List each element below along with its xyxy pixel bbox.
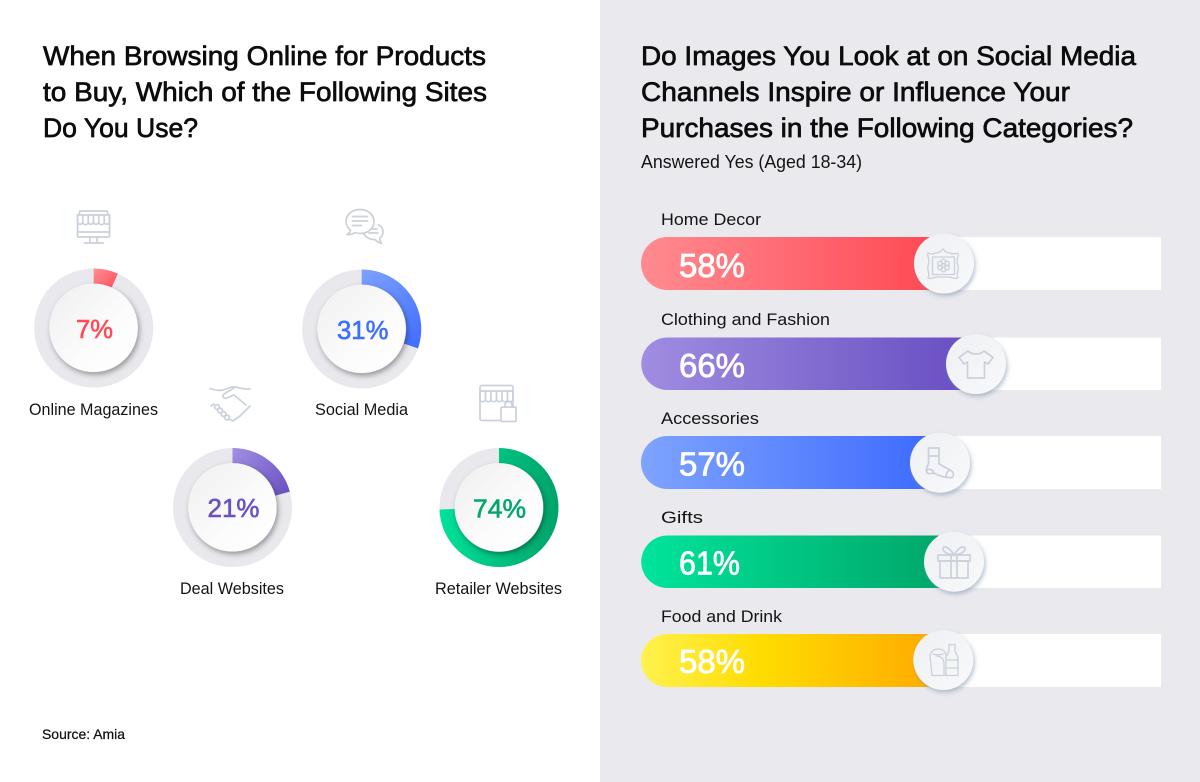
bar: clothing and fashion 66%: Clothing and Fashion xyxy=(661,310,830,329)
bar: home decor 58%: Home Decor xyxy=(661,210,761,229)
subtitle: Answered Yes (Aged 18-34) xyxy=(641,152,862,172)
title: social media images xyxy=(641,41,1137,143)
donut: social media xyxy=(310,210,414,419)
bar: accessories 57% xyxy=(641,409,1161,493)
bar: accessories 57%: Accessories xyxy=(661,409,759,428)
donut: deal websites: 21% xyxy=(208,493,260,523)
title: browsing sites: When Browsing Online for Products xyxy=(43,41,486,71)
donut: retailer websites: 74% xyxy=(473,494,526,524)
title: social media images: Purchases in the Following Categories? xyxy=(641,113,1133,143)
bar: food and drink 58% xyxy=(641,607,1161,690)
bar: home decor 58% xyxy=(641,210,1161,294)
donut: retailer websites xyxy=(435,386,562,598)
title: browsing sites: to Buy, Which of the Following Sites xyxy=(43,77,487,107)
title: social media images: Channels Inspire or Influence Your xyxy=(641,77,1070,107)
icon: gift box xyxy=(938,547,970,578)
icon: sock xyxy=(926,448,954,478)
bar: food and drink 58%: 58% xyxy=(679,643,745,680)
donut: online magazines xyxy=(29,211,158,419)
donut: retailer websites: Retailer Websites xyxy=(435,579,562,598)
bar: accessories 57%: 57% xyxy=(679,446,745,482)
bar: gifts 61% xyxy=(641,508,1161,592)
donut: deal websites: Deal Websites xyxy=(180,579,284,598)
donut: online magazines: 7% xyxy=(76,314,113,344)
donut: social media: Social Media xyxy=(315,400,409,419)
donut: deal websites xyxy=(180,387,284,598)
bar: clothing and fashion 66% xyxy=(641,310,1161,394)
title: browsing sites xyxy=(43,41,487,143)
title: browsing sites: Do You Use? xyxy=(43,113,198,143)
icon: t-shirt xyxy=(959,351,993,378)
bar: gifts 61%: Gifts xyxy=(661,508,703,527)
title: social media images: Do Images You Look at on Social Media xyxy=(641,41,1137,71)
icon: storefront monitor xyxy=(78,211,110,243)
icon: picture frame xyxy=(928,249,958,278)
icon: storefront and bag xyxy=(480,386,516,422)
bar: gifts 61%: 61% xyxy=(679,544,740,582)
source note: Source: Amia xyxy=(42,726,125,742)
bar: home decor 58%: 58% xyxy=(679,247,745,284)
bar: food and drink 58%: Food and Drink xyxy=(661,607,783,626)
donut: social media: 31% xyxy=(337,315,388,345)
icon: burrito and soda bottle xyxy=(930,644,958,676)
donut: online magazines: Online Magazines xyxy=(29,400,158,419)
bar: clothing and fashion 66%: 66% xyxy=(679,347,745,384)
icon: speech bubbles xyxy=(346,210,383,243)
panel: right background xyxy=(600,0,1200,782)
panel: left background xyxy=(0,0,600,782)
icon: handshake xyxy=(210,387,250,421)
